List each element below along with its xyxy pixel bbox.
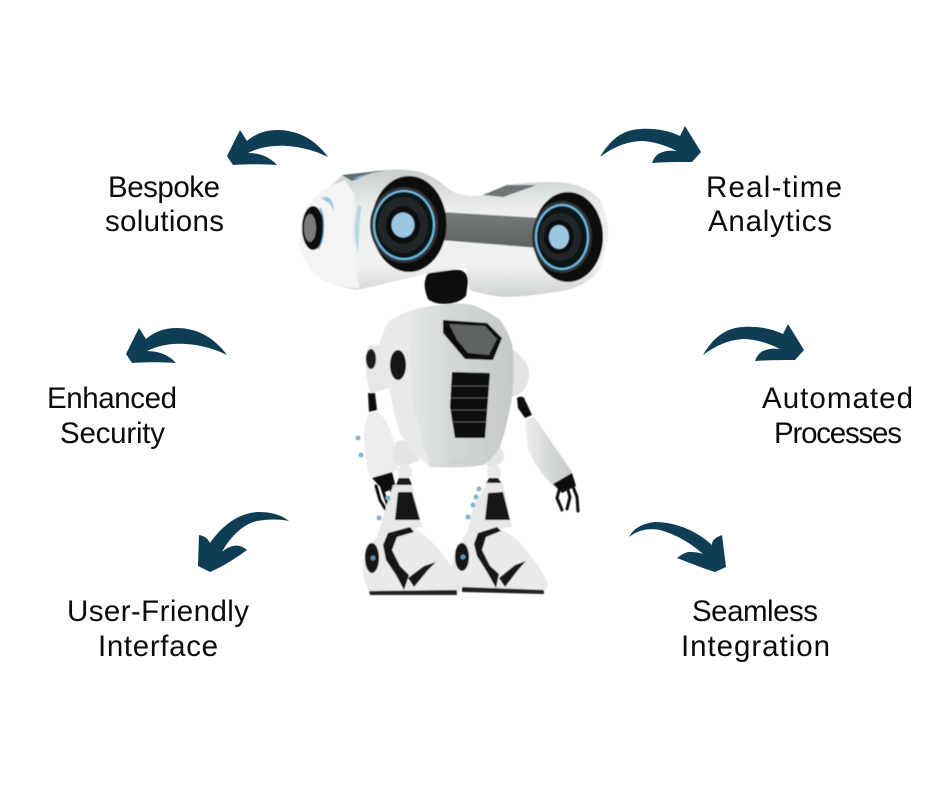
- arrow: to Enhanced Security: [126, 328, 227, 363]
- label: Bespoke solutions: Bespoke: [108, 171, 220, 204]
- label: Real-time Analytics: Real-time: [706, 171, 842, 204]
- arrow: to Real-time Analytics: [600, 126, 701, 163]
- label: Enhanced Security: Enhanced: [47, 382, 177, 415]
- label: User-Friendly Interface: User-Friendly: [67, 595, 249, 628]
- label: Real-time Analytics: Analytics: [708, 205, 832, 238]
- arrow: to Bespoke solutions: [227, 130, 328, 165]
- robot: neck: [425, 270, 468, 304]
- label: Automated Processes: Processes: [774, 417, 902, 450]
- label: User-Friendly Interface: Interface: [98, 630, 218, 663]
- label: Seamless Integration: Seamless: [692, 595, 818, 628]
- label: Automated Processes: [762, 382, 913, 450]
- robot: chest grill: [450, 372, 490, 438]
- robot: right leg and foot: [452, 445, 548, 594]
- label: Seamless Integration: [681, 595, 830, 663]
- arrow: to User-Friendly Interface: [198, 512, 289, 572]
- robot: left leg and foot: [363, 440, 462, 595]
- label: Seamless Integration: Integration: [681, 630, 830, 663]
- arrow: to Automated Processes: [703, 324, 804, 361]
- label: Real-time Analytics: [706, 171, 842, 238]
- label: Automated Processes: Automated: [762, 382, 913, 415]
- label: Enhanced Security: Security: [60, 417, 165, 450]
- arrow: to Seamless Integration: [629, 522, 726, 572]
- robot: left eye: [370, 176, 446, 272]
- robot: torso: [380, 304, 514, 468]
- label: Bespoke solutions: solutions: [105, 205, 224, 238]
- label: Bespoke solutions: [105, 171, 224, 238]
- robot: chest screen: [443, 320, 502, 360]
- robot: right eye: [532, 192, 603, 282]
- label: Enhanced Security: [47, 382, 177, 450]
- robot: head: [300, 170, 608, 297]
- robot: right arm: [512, 350, 578, 511]
- robot: left arm: [356, 345, 398, 510]
- label: User-Friendly Interface: [67, 595, 249, 663]
- robot: gray visor band: [440, 212, 540, 248]
- robot: head side port: [302, 206, 324, 250]
- robot illustration: [300, 170, 608, 595]
